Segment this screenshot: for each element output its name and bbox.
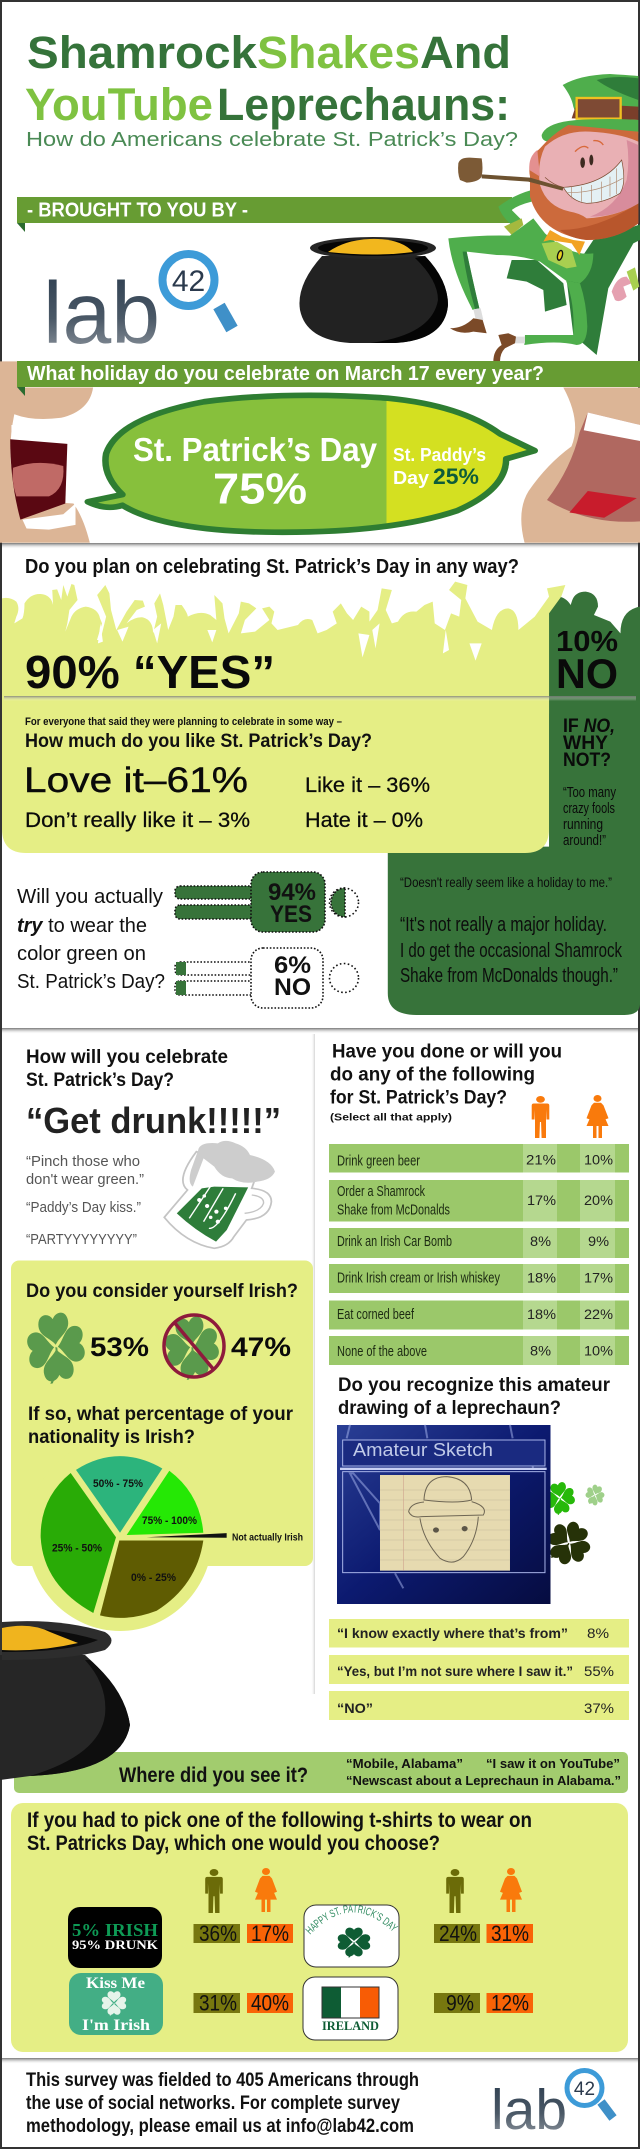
text block: wear green question: try to wear the — [17, 915, 147, 937]
band: where did you see it: “Mobile, Alabama” — [346, 1756, 463, 1771]
icon: orange woman — [586, 1095, 608, 1138]
table: activities: 17% — [527, 1192, 556, 1208]
table: activities: 9% — [588, 1233, 609, 1249]
text block: if no why not — [563, 716, 616, 849]
t-shirt: happy st patricks: HAPPY ST. PATRICK’S DAY — [305, 1904, 398, 1934]
text block: how will you celebrate — [26, 1047, 281, 1248]
logo: lab42 — [43, 254, 232, 362]
table: recognize answers: “NO” — [337, 1700, 373, 1716]
chart: person 6% no: 6% — [274, 952, 311, 979]
hand and money — [612, 277, 632, 301]
text block: if no why not: running — [563, 816, 603, 833]
illustration: crowd silhouette — [2, 582, 565, 713]
pie chart: 25% - 50% — [52, 1542, 102, 1554]
panel: faces and speech bubble — [0, 361, 640, 543]
shoes — [473, 308, 483, 321]
text block: how much do you like: How much do you like St. Patrick’s Day? — [25, 731, 372, 752]
panel: faces and speech bubble: St. Patrick’s Day — [133, 431, 378, 468]
text block: if no why not: around!” — [563, 832, 606, 849]
footer text: the use of social networks. For complete survey — [26, 2093, 400, 2114]
panel: irish: 47% — [231, 1332, 291, 1362]
title: Leprechauns: — [217, 79, 510, 130]
text block: how will you celebrate: How will you celebrate — [26, 1047, 228, 1068]
dark coat — [567, 223, 640, 355]
title: Shamrock — [27, 27, 258, 78]
table: activities: Drink an Irish Car Bomb — [337, 1233, 452, 1250]
percentage boxes: 40% — [251, 1990, 289, 2016]
text block: if no why not: “Too many — [563, 784, 616, 801]
pie chart: 0% - 25% — [131, 1572, 176, 1584]
table: activities: Drink Irish cream or Irish whiskey — [337, 1270, 500, 1286]
panel: faces and speech bubble: What holiday do you celebrate on March 17 every year? — [27, 363, 544, 385]
band: where did you see it: Where did you see it? — [119, 1764, 308, 1787]
t-shirt: ireland: IRELAND — [322, 2018, 379, 2033]
table: recognize answers: 8% — [587, 1625, 609, 1641]
chart: person 94% yes — [175, 872, 358, 932]
panel: crowd and yes: 90% “YES” — [25, 646, 275, 698]
chart: person 94% yes: YES — [270, 901, 312, 928]
panel: irish: If so, what percentage of your — [28, 1404, 294, 1425]
text block: how much do you like — [24, 716, 430, 832]
vest and bow — [542, 242, 577, 268]
panel: faces and speech bubble: Day — [393, 468, 429, 488]
percentage boxes: 31% — [199, 1990, 237, 2016]
icon: pot of gold — [299, 237, 448, 343]
footer text: methodology, please email us at info@lab42.com — [26, 2116, 414, 2137]
speech bubble — [88, 395, 535, 532]
text block: if no why not: IF NO, — [563, 716, 615, 737]
text block: wear green question — [17, 886, 165, 993]
table: activities: 8% — [530, 1233, 551, 1249]
table: recognize answers: 55% — [584, 1663, 614, 1679]
text block: how will you celebrate: St. Patrick’s Day? — [26, 1070, 174, 1091]
icon: green beer mug — [164, 1141, 275, 1248]
band: where did you see it — [14, 1752, 628, 1793]
pie chart — [41, 1456, 303, 1618]
text block: wear green question: St. Patrick’s Day? — [17, 971, 165, 993]
table: activities: 22% — [584, 1306, 613, 1322]
banner: brought to you by: - BROUGHT TO YOU BY - — [27, 200, 248, 222]
heading: do you recognize: drawing of a leprechaun? — [338, 1398, 561, 1419]
table: activities: Order a Shamrock — [337, 1183, 425, 1200]
pie chart: Not actually Irish — [232, 1532, 303, 1544]
text block: how much do you like: Love it–61% — [24, 761, 248, 800]
table: activities: 10% — [584, 1152, 613, 1168]
panel: irish: nationality is Irish? — [28, 1427, 195, 1448]
icons: gender — [205, 1868, 522, 1913]
t-shirt: kiss me: I'm Irish — [82, 2017, 150, 2034]
t-shirt: ireland — [303, 1977, 398, 2040]
title: YouTube — [25, 79, 213, 130]
panel: t-shirts: If you had to pick one of the following t-shirts to wear on — [27, 1809, 532, 1832]
text block: how will you celebrate: “PARTYYYYYYYY” — [26, 1231, 137, 1248]
band: where did you see it: “Newscast about a Leprechaun in Alabama.” — [346, 1773, 621, 1788]
chart: person 6% no: NO — [274, 974, 311, 1001]
panel: 10% no column — [388, 592, 640, 1015]
logo: lab42: 42 — [172, 265, 205, 298]
text block: wear green question: color green on — [17, 943, 146, 965]
icon: dark shamrock — [539, 1514, 598, 1573]
image: amateur sketch: Amateur Sketch — [353, 1440, 493, 1460]
hat — [563, 74, 638, 117]
text block: have you done: (Select all that apply) — [330, 1112, 452, 1124]
table: activities: Shake from McDonalds — [337, 1202, 450, 1218]
t-shirt: 5% irish — [68, 1907, 162, 1968]
percentage boxes: 36% — [199, 1921, 237, 1946]
percentage boxes: 12% — [491, 1990, 529, 2016]
table: activities: 10% — [584, 1342, 613, 1358]
body and bent leg — [448, 218, 593, 310]
image: amateur sketch — [337, 1425, 550, 1604]
icon: crossed shamrock — [162, 1313, 224, 1383]
text block: have you done: Have you done or will you — [332, 1042, 562, 1062]
table: activities: 21% — [526, 1152, 556, 1168]
text block: if no why not: NOT? — [563, 750, 611, 771]
table: activities: 18% — [527, 1270, 556, 1286]
icon: leprechaun — [448, 74, 640, 362]
title: Shakes — [257, 27, 420, 78]
percentage boxes: 24% — [439, 1921, 477, 1946]
beard — [529, 125, 638, 240]
panel: faces and speech bubble: St. Paddy’s — [393, 445, 486, 465]
text block: quotes — [400, 874, 623, 987]
icon: green shamrock — [543, 1480, 577, 1517]
table: activities: 18% — [527, 1306, 556, 1322]
icon: orange man — [532, 1096, 549, 1138]
t-shirt: kiss me: Kiss Me — [86, 1975, 145, 1992]
percentage boxes: 9% — [446, 1990, 474, 2016]
arm on hip — [498, 190, 532, 225]
text block: how will you celebrate: don't wear green.” — [26, 1171, 144, 1188]
panel: faces and speech bubble: 25% — [433, 464, 479, 489]
question banner — [17, 361, 640, 387]
footer text — [26, 2070, 419, 2137]
icon: shamrock — [24, 1309, 88, 1387]
face — [539, 132, 638, 218]
text block: have you done — [330, 1042, 562, 1124]
stat: 10% no — [556, 626, 618, 697]
title — [25, 27, 511, 130]
table: recognize answers — [329, 1619, 629, 1720]
stat: 10% no: 10% — [556, 626, 618, 658]
chart: person 6% no — [175, 948, 358, 1008]
illustration: shouting mouths — [0, 361, 640, 543]
text block: if no why not: crazy fools — [563, 800, 615, 817]
table: activities: 17% — [584, 1270, 613, 1286]
heading: do you plan: Do you plan on celebrating St. Patrick’s Day in any way? — [25, 556, 519, 578]
band: where did you see it: “I saw it on YouTube” — [486, 1756, 620, 1771]
smile — [563, 160, 624, 203]
chart: person 94% yes: 94% — [268, 879, 316, 906]
text block: how much do you like: Don’t really like it – 3% — [25, 809, 250, 832]
panel: faces and speech bubble: 75% — [213, 464, 307, 514]
text block: how will you celebrate: “Paddy’s Day kiss.” — [26, 1199, 141, 1216]
panel: crowd and yes — [2, 582, 565, 853]
table: activities: Drink green beer — [337, 1152, 420, 1170]
pie chart: 75% - 100% — [142, 1515, 197, 1527]
pie chart: 50% - 75% — [93, 1478, 143, 1490]
footer logo: lab42: lab — [491, 2078, 567, 2142]
text block: how much do you like: Like it – 36% — [305, 774, 430, 797]
stat: 10% no: NO — [556, 650, 618, 697]
text block: have you done: do any of the following — [330, 1064, 535, 1086]
table: activities: Eat corned beef — [337, 1306, 415, 1323]
text block: how much do you like: For everyone that said they were planning to celebrate in some way – — [25, 716, 342, 728]
table: activities — [329, 1144, 629, 1365]
percentage boxes: 31% — [491, 1921, 529, 1946]
table: recognize answers: 37% — [584, 1700, 614, 1716]
title: And — [420, 27, 511, 78]
percentage boxes: 17% — [251, 1921, 289, 1946]
text block: if no why not: WHY — [563, 733, 608, 754]
panel: irish — [11, 1260, 313, 1631]
table: activities: None of the above — [337, 1343, 427, 1360]
footer logo: lab42 — [491, 2070, 613, 2142]
table: activities: 8% — [530, 1342, 551, 1358]
percentage boxes — [194, 1921, 533, 2016]
icon: light shamrock — [583, 1482, 607, 1508]
panel: irish: 53% — [90, 1332, 149, 1362]
text block: how much do you like: Hate it – 0% — [305, 809, 423, 832]
panel: t-shirts: St. Patricks Day, which one would you choose? — [27, 1832, 440, 1855]
pipe — [458, 158, 482, 183]
t-shirt: kiss me — [69, 1973, 163, 2035]
t-shirt: happy st patricks — [304, 1904, 400, 1968]
footer logo: lab42: 42 — [574, 2079, 595, 2100]
subtitle: How do Americans celebrate St. Patrick’s Day? — [26, 129, 518, 151]
table: recognize answers: “I know exactly where that’s from” — [337, 1625, 568, 1641]
table: activities: 20% — [584, 1192, 613, 1208]
table: recognize answers: “Yes, but I’m not sure where I saw it.” — [337, 1663, 573, 1679]
text block: how will you celebrate: “Get drunk!!!!!” — [26, 1100, 281, 1141]
icon: large pot of gold — [0, 1621, 130, 1780]
banner: brought to you by — [17, 197, 512, 232]
footer text: This survey was fielded to 405 Americans through — [26, 2070, 419, 2091]
heading: do you recognize: Do you recognize this amateur — [338, 1375, 611, 1396]
text block: have you done: for St. Patrick’s Day? — [330, 1088, 507, 1108]
panel: irish: Do you consider yourself Irish? — [26, 1281, 298, 1302]
text block: how will you celebrate: “Pinch those who — [26, 1153, 140, 1170]
t-shirt: 5% irish: 95% DRUNK — [72, 1937, 159, 1952]
logo: lab42: lab — [43, 265, 160, 362]
text block: wear green question: Will you actually — [17, 886, 163, 908]
heading: do you recognize — [338, 1375, 611, 1419]
extended leg — [524, 281, 587, 345]
panel: t-shirts — [11, 1803, 628, 2052]
t-shirt: 5% irish: 5% IRISH — [72, 1920, 158, 1940]
